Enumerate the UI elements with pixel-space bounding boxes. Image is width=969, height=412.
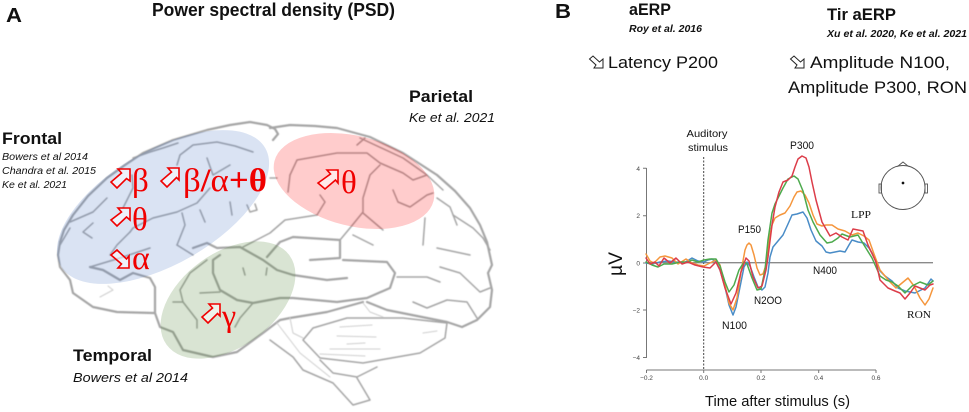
Tir aERP heading: Xu et al. 2020, Ke et al. 2021: [826, 28, 967, 40]
temporal gamma increase: [202, 297, 236, 333]
component labels: P150: [738, 224, 761, 236]
component labels: N400: [813, 265, 837, 277]
x tick labels: 0.2: [756, 375, 766, 382]
component labels: [722, 140, 931, 332]
x tick labels: 0.6: [871, 375, 881, 382]
parietal theta increase: [318, 165, 357, 201]
frontal alpha decrease: [111, 240, 150, 277]
traces: [646, 156, 933, 315]
orange trace: [646, 191, 933, 310]
frontal label: Ke et al. 2021: [2, 180, 67, 191]
y axis title: µV: [606, 252, 627, 276]
frontal beta increase: [111, 163, 149, 199]
frontal label: Chandra et al. 2015: [2, 166, 96, 177]
parietal region highlight: [264, 117, 444, 245]
x axis title: Time after stimulus (s): [705, 393, 850, 410]
Tir aERP finding: Amplitude P300, RON: [788, 78, 967, 97]
parietal label: Parietal: [409, 87, 473, 106]
aERP heading: aERP: [629, 0, 671, 19]
frontal beta over alpha plus theta increase: β/α+θ: [183, 163, 267, 199]
panel label B: B: [555, 1, 571, 23]
aERP heading: [629, 0, 702, 35]
x tick labels: 0.0: [699, 375, 709, 382]
stimulus onset line: [703, 157, 705, 370]
red trace: [646, 156, 933, 304]
aERP finding: Latency P200: [608, 53, 718, 72]
y tick labels: [633, 166, 640, 362]
Tir aERP finding: [788, 53, 967, 97]
Tir aERP finding: Amplitude N100,: [810, 53, 950, 72]
temporal gamma increase: γ: [221, 297, 236, 333]
x tick labels: −0.2: [640, 375, 653, 382]
green trace: [646, 176, 933, 293]
frontal label: Bowers et al 2014: [2, 152, 88, 163]
y tick labels: 0: [636, 260, 640, 268]
temporal region highlight: [139, 217, 317, 383]
zero line: [646, 262, 933, 264]
frontal label: [2, 129, 96, 191]
panel label A: A: [6, 5, 22, 27]
parietal label: [409, 87, 495, 125]
ERP line chart: [606, 128, 933, 410]
x tick labels: 0.4: [814, 375, 824, 382]
frontal theta increase: [111, 202, 148, 238]
title: power spectral density: Power spectral density (PSD): [152, 0, 395, 20]
y tick labels: 2: [636, 213, 640, 220]
y tick labels: −4: [633, 355, 640, 362]
component labels: P300: [790, 140, 814, 152]
x axis: [646, 370, 876, 373]
aERP heading: Roy et al. 2016: [629, 23, 702, 35]
component labels: N2OO: [754, 295, 782, 307]
temporal label: [73, 346, 188, 385]
Tir aERP heading: Tir aERP: [827, 5, 896, 24]
frontal theta increase: θ: [132, 202, 148, 238]
auditory stimulus label: [686, 128, 728, 154]
x tick labels: [640, 375, 881, 382]
temporal label: Temporal: [73, 346, 152, 365]
y tick labels: −2: [633, 308, 640, 314]
frontal alpha decrease: α: [132, 240, 150, 277]
frontal label: Frontal: [2, 129, 62, 148]
frontal region highlight: [32, 99, 294, 315]
blue trace: [646, 212, 933, 315]
brain illustration: [58, 122, 492, 405]
auditory stimulus label: stimulus: [688, 142, 728, 154]
frontal beta increase: β: [132, 163, 149, 199]
y tick labels: 4: [636, 166, 640, 173]
icon: scalp electrode map: [879, 162, 928, 210]
parietal label: Ke et al. 2021: [409, 110, 495, 125]
temporal label: Bowers et al 2014: [73, 370, 188, 385]
component labels: LPP: [851, 209, 871, 221]
Tir aERP heading: [826, 5, 967, 40]
auditory stimulus label: Auditory: [686, 128, 728, 140]
component labels: N100: [722, 320, 747, 332]
parietal theta increase: θ: [341, 165, 357, 201]
y axis: [643, 168, 646, 358]
component labels: RON: [907, 309, 931, 321]
